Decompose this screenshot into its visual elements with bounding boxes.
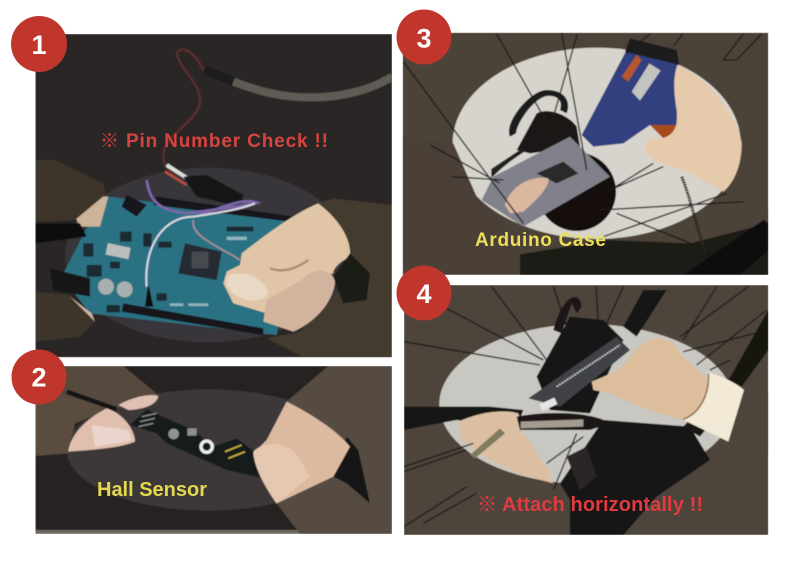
badge 2 [12,350,66,404]
badge 3: 3 [416,24,432,54]
label: Arduino Case: Arduino Case [475,230,606,251]
badge 1: 1 [31,30,47,60]
badge 1 [11,16,67,72]
panel 4: LED strip attachment photo [404,285,768,535]
badge 4: 4 [416,279,432,309]
badge 3 [396,10,452,64]
label: Attach horizontally: ※ Attach horizontally !! [477,494,703,516]
label: Hall Sensor: Hall Sensor [97,479,207,501]
panel 1: Arduino board wiring photo [35,34,392,357]
panel 3: glue gun and Arduino case photo [403,33,768,275]
badge 4 [396,266,452,320]
label: Pin Number Check: ※ Pin Number Check !! [100,131,328,152]
panel 2: hall sensor photo [35,366,392,534]
badge 2: 2 [31,362,47,392]
